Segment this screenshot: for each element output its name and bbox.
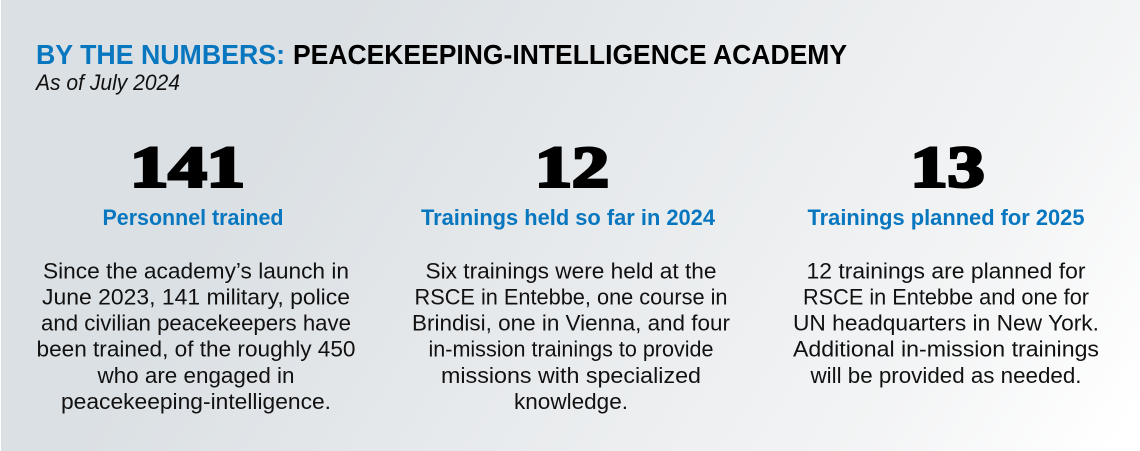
text block: trainings planned: 12 trainings are planned for [806,258,1086,284]
text block: trainings held: knowledge. [514,389,628,414]
panel: trainings planned for 2025 [793,134,1099,388]
panel: personnel trained [36,134,356,414]
number: 12: 12 [535,134,609,200]
title: BY THE NUMBERS: [36,39,285,70]
text block: trainings planned: will be provided as needed. [809,363,1082,388]
text block: trainings planned: UN headquarters in New York. [793,310,1099,336]
text block: personnel trained: June 2023, 141 military, police [42,284,350,310]
text block: trainings held: RSCE in Entebbe, one course in [414,284,728,310]
subheading: trainings held: Trainings held so far in 2024 [421,205,716,230]
text block: personnel trained: peacekeeping-intelligence. [61,389,331,414]
text block: trainings held: in-mission trainings to provide [428,336,714,362]
text block: trainings planned: RSCE in Entebbe and one for [803,284,1089,310]
text block: personnel trained: who are engaged in [96,363,294,388]
subheading: trainings planned: Trainings planned for 2025 [808,205,1084,230]
text block: personnel trained [36,258,356,414]
text block: personnel trained: Since the academy’s launch in [43,258,349,284]
text block: trainings held: Brindisi, one in Vienna, and four [412,310,730,336]
text block: trainings held: Six trainings were held at the [426,258,716,284]
text block: personnel trained: and civilian peacekeepers have [41,310,351,336]
title: PEACEKEEPING-INTELLIGENCE ACADEMY [293,39,847,70]
text block: trainings planned: Additional in-mission trainings [793,336,1099,362]
panel: trainings held so far in 2024 [412,134,730,414]
subheading: personnel trained: Personnel trained [102,205,284,230]
text block: trainings held [412,258,730,414]
text block: personnel trained: been trained, of the roughly 450 [36,336,356,362]
subtitle: As of July 2024 [34,70,180,95]
text block: trainings held: missions with specialized [441,363,701,388]
title [36,39,847,70]
text block: trainings planned [793,258,1099,388]
number: 13: 13 [910,134,984,200]
number: 141: 141 [130,134,245,200]
